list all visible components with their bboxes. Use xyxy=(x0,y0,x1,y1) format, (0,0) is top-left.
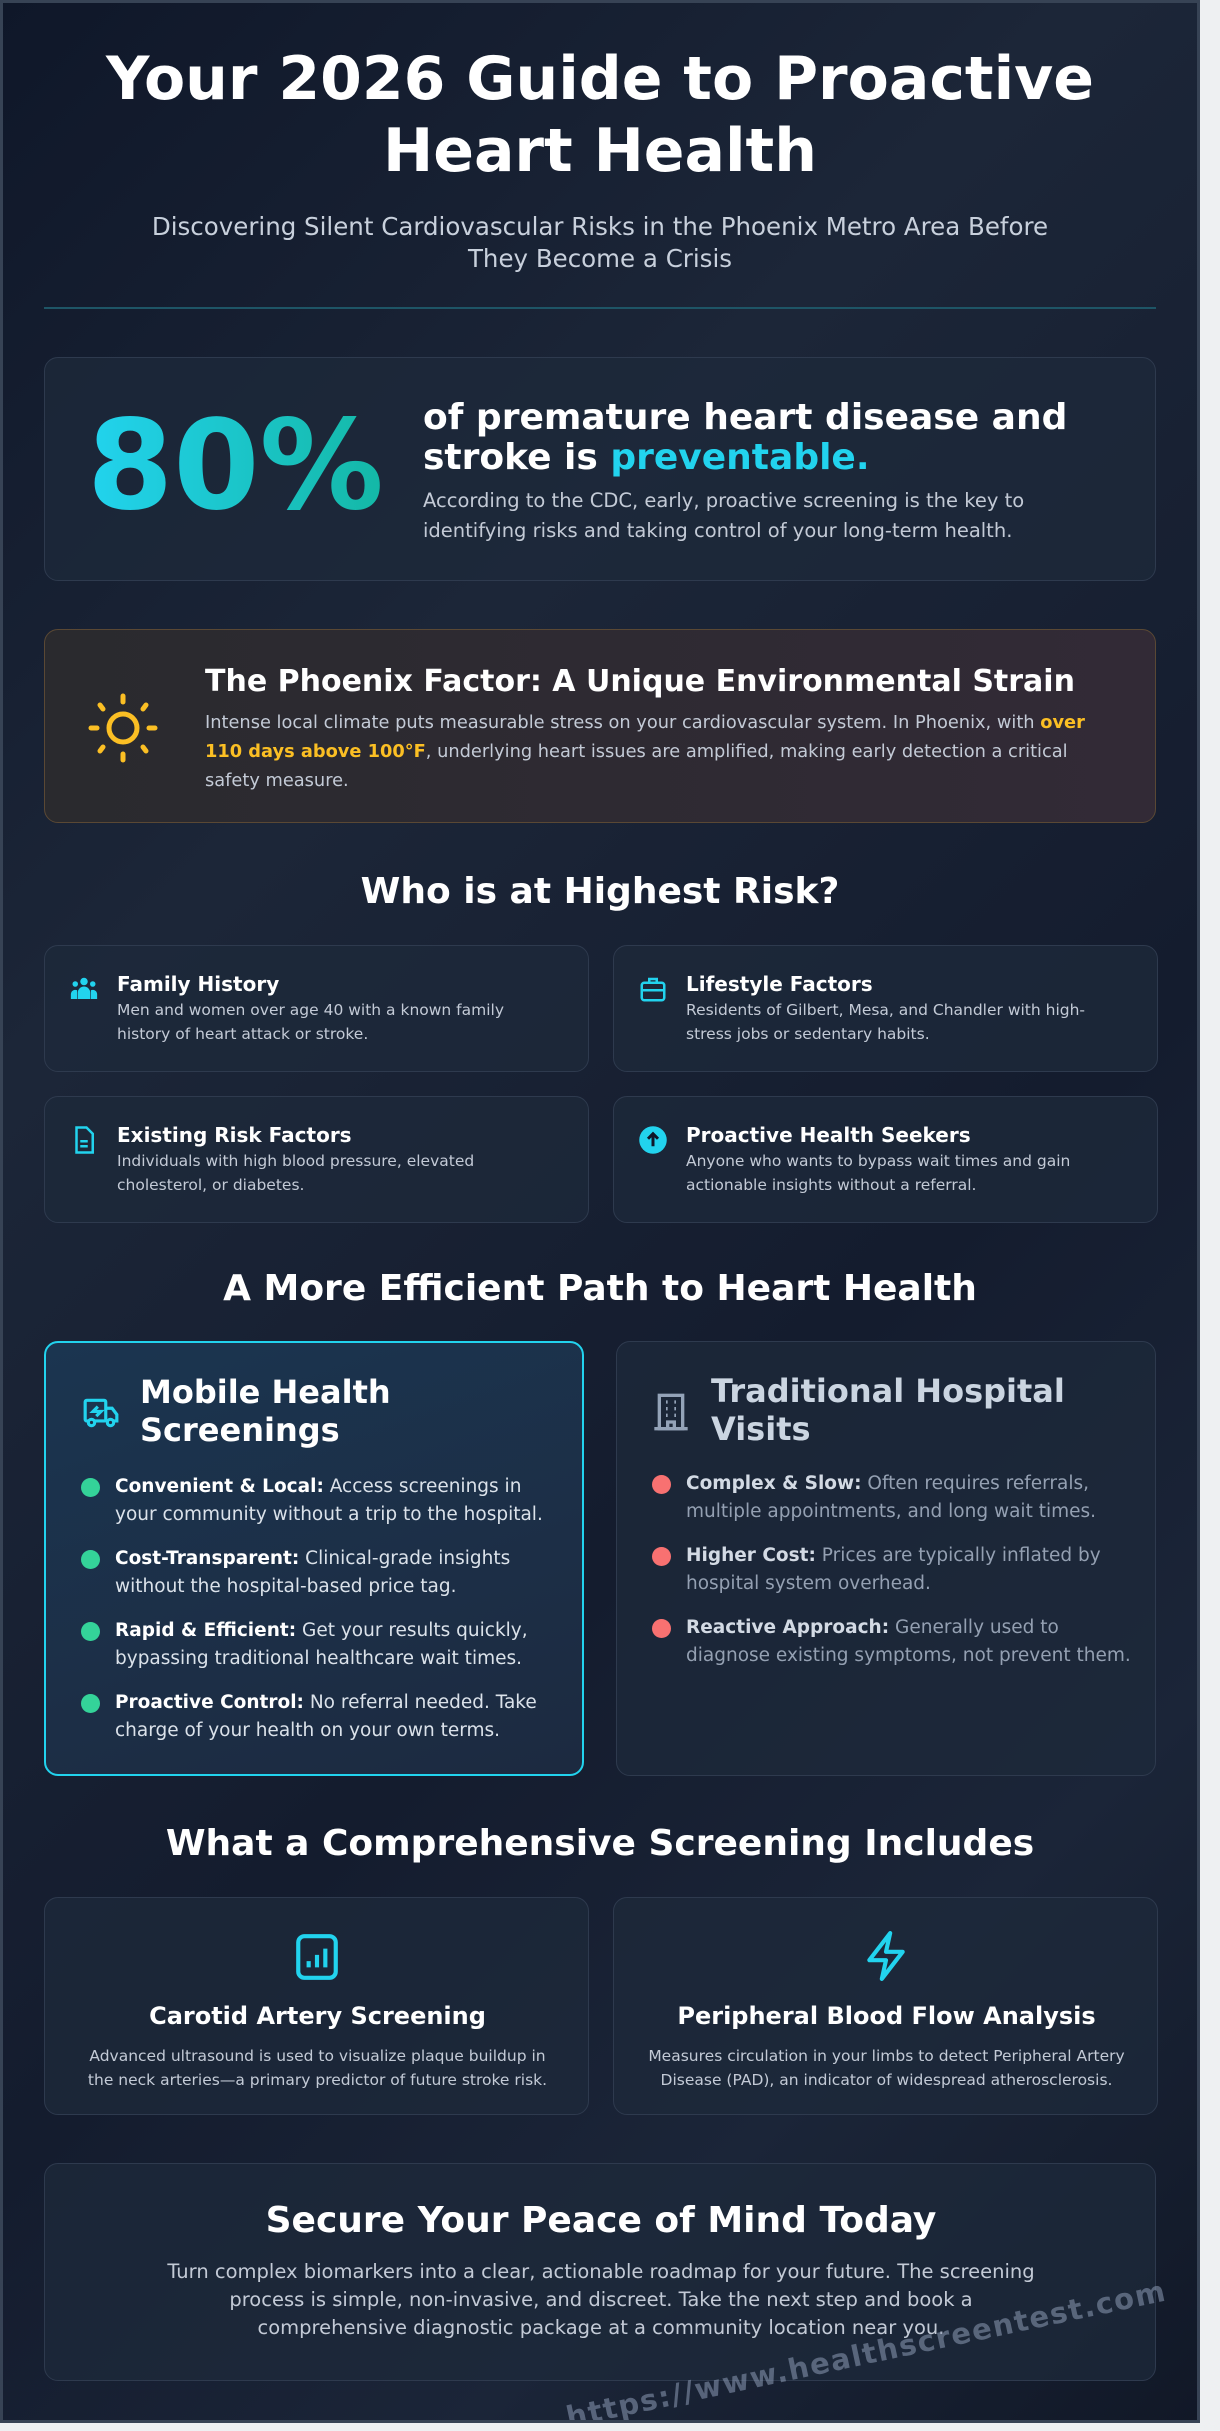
card: lifestyle xyxy=(613,945,1158,1072)
phoenix heading: The Phoenix Factor: A Unique Environmental Strain xyxy=(205,664,1075,699)
list: drawbacks: Higher Cost: Prices are typically inflated by hospital system overhead. xyxy=(686,1545,1101,1594)
card: existing risk: Individuals with high blood pressure, elevated cholesterol, or diabetes. xyxy=(117,1152,474,1194)
card: carotid xyxy=(44,1897,589,2115)
peripheral title: Peripheral Blood Flow Analysis xyxy=(677,2002,1096,2030)
traditional title xyxy=(711,1372,1065,1448)
cta body: Turn complex biomarkers into a clear, actionable roadmap for your future. The screening xyxy=(167,2260,1035,2283)
card: proactive seekers: Anyone who wants to bypass wait times and gain actionable insights without a referral. xyxy=(686,1152,1070,1194)
subtitle xyxy=(152,212,1048,273)
stat heading: of premature heart disease and xyxy=(423,397,1067,438)
icon: truck xyxy=(84,1398,118,1428)
heading: efficient path: A More Efficient Path to Heart Health xyxy=(223,1268,977,1309)
panel: call to action xyxy=(44,2163,1156,2381)
icon: document xyxy=(75,1126,94,1154)
card: existing risk xyxy=(44,1096,589,1223)
cta title: Secure Your Peace of Mind Today xyxy=(266,2200,936,2241)
heading: screening includes: What a Comprehensive Screening Includes xyxy=(166,1823,1034,1864)
card: family history xyxy=(44,945,589,1072)
card: existing risk: Existing Risk Factors xyxy=(117,1123,352,1147)
mobile title: Mobile Health xyxy=(140,1373,391,1411)
icon: briefcase xyxy=(640,978,666,1002)
icon: up arrow circle xyxy=(639,1126,667,1154)
icon: people xyxy=(70,978,98,999)
peripheral body: Measures circulation in your limbs to detect Peripheral Artery Disease (PAD), an indicator of widespread atherosclerosis. xyxy=(648,2047,1125,2089)
panel: phoenix factor xyxy=(44,629,1156,823)
title xyxy=(106,44,1094,186)
title: Heart Health xyxy=(383,116,817,186)
stat heading xyxy=(423,397,1067,478)
panel: 80% stat xyxy=(44,357,1156,581)
panel: mobile screenings xyxy=(44,1341,584,1776)
stat body: According to the CDC, early, proactive screening is the key to xyxy=(423,489,1024,512)
card: peripheral xyxy=(613,1897,1158,2115)
carotid title: Carotid Artery Screening xyxy=(149,2002,486,2030)
list: benefits: Convenient & Local: Access screenings in your community without a trip to the hospital. xyxy=(115,1476,543,1525)
traditional title: Visits xyxy=(711,1410,811,1448)
icon: lightning xyxy=(867,1931,905,1981)
card: family history: Family History xyxy=(117,972,279,996)
icon: chart xyxy=(296,1934,338,1980)
mobile title xyxy=(140,1373,391,1449)
subtitle: They Become a Crisis xyxy=(468,244,732,273)
cta body xyxy=(167,2260,1035,2339)
card: lifestyle: Lifestyle Factors xyxy=(686,972,873,996)
list: benefits: Proactive Control: No referral needed. Take charge of your health on your own terms. xyxy=(115,1692,537,1741)
big stat: 80% xyxy=(87,394,384,538)
card: lifestyle: Residents of Gilbert, Mesa, and Chandler with high-stress jobs or sedentary habits. xyxy=(686,1001,1085,1043)
list: benefits xyxy=(81,1476,543,1741)
carotid body: Advanced ultrasound is used to visualize plaque buildup in the neck arteries—a primary predictor of future stroke risk. xyxy=(88,2047,547,2089)
card: proactive seekers xyxy=(613,1096,1158,1223)
subtitle: Discovering Silent Cardiovascular Risks in the Phoenix Metro Area Before xyxy=(152,212,1048,241)
card: proactive seekers: Proactive Health Seekers xyxy=(686,1123,971,1147)
phoenix body: Intense local climate puts measurable stress on your cardiovascular system. In Phoenix, with over 110 days above 100°F, underlying heart issues are amplified, making early detection a critical safety measure. xyxy=(205,712,1085,791)
icon: building xyxy=(654,1394,688,1430)
title: Your 2026 Guide to Proactive xyxy=(106,44,1094,114)
icon: sun xyxy=(88,694,158,762)
list: benefits: Rapid & Efficient: Get your results quickly, bypassing traditional healthcare wait times. xyxy=(115,1620,528,1669)
list: drawbacks: Reactive Approach: Generally used to diagnose existing symptoms, not prevent them. xyxy=(686,1617,1131,1666)
traditional title: Traditional Hospital xyxy=(711,1372,1065,1410)
heading: who is at risk: Who is at Highest Risk? xyxy=(361,871,839,912)
list: benefits: Cost-Transparent: Clinical-grade insights without the hospital-based price tag. xyxy=(115,1548,510,1597)
cta body: comprehensive diagnostic package at a community location near you. xyxy=(258,2316,944,2339)
panel: traditional hospital xyxy=(616,1341,1156,1776)
cta body: process is simple, non-invasive, and discreet. Take the next step and book a xyxy=(229,2288,973,2311)
list: drawbacks xyxy=(652,1473,1131,1666)
card: family history: Men and women over age 40 with a known family history of heart attack or stroke. xyxy=(117,1001,504,1043)
stat body: identifying risks and taking control of your long-term health. xyxy=(423,519,1012,542)
list: drawbacks: Complex & Slow: Often requires referrals, multiple appointments, and long wait times. xyxy=(686,1473,1096,1522)
mobile title: Screenings xyxy=(140,1411,340,1449)
stat body xyxy=(423,489,1024,542)
stat heading: stroke is preventable. xyxy=(423,437,870,478)
